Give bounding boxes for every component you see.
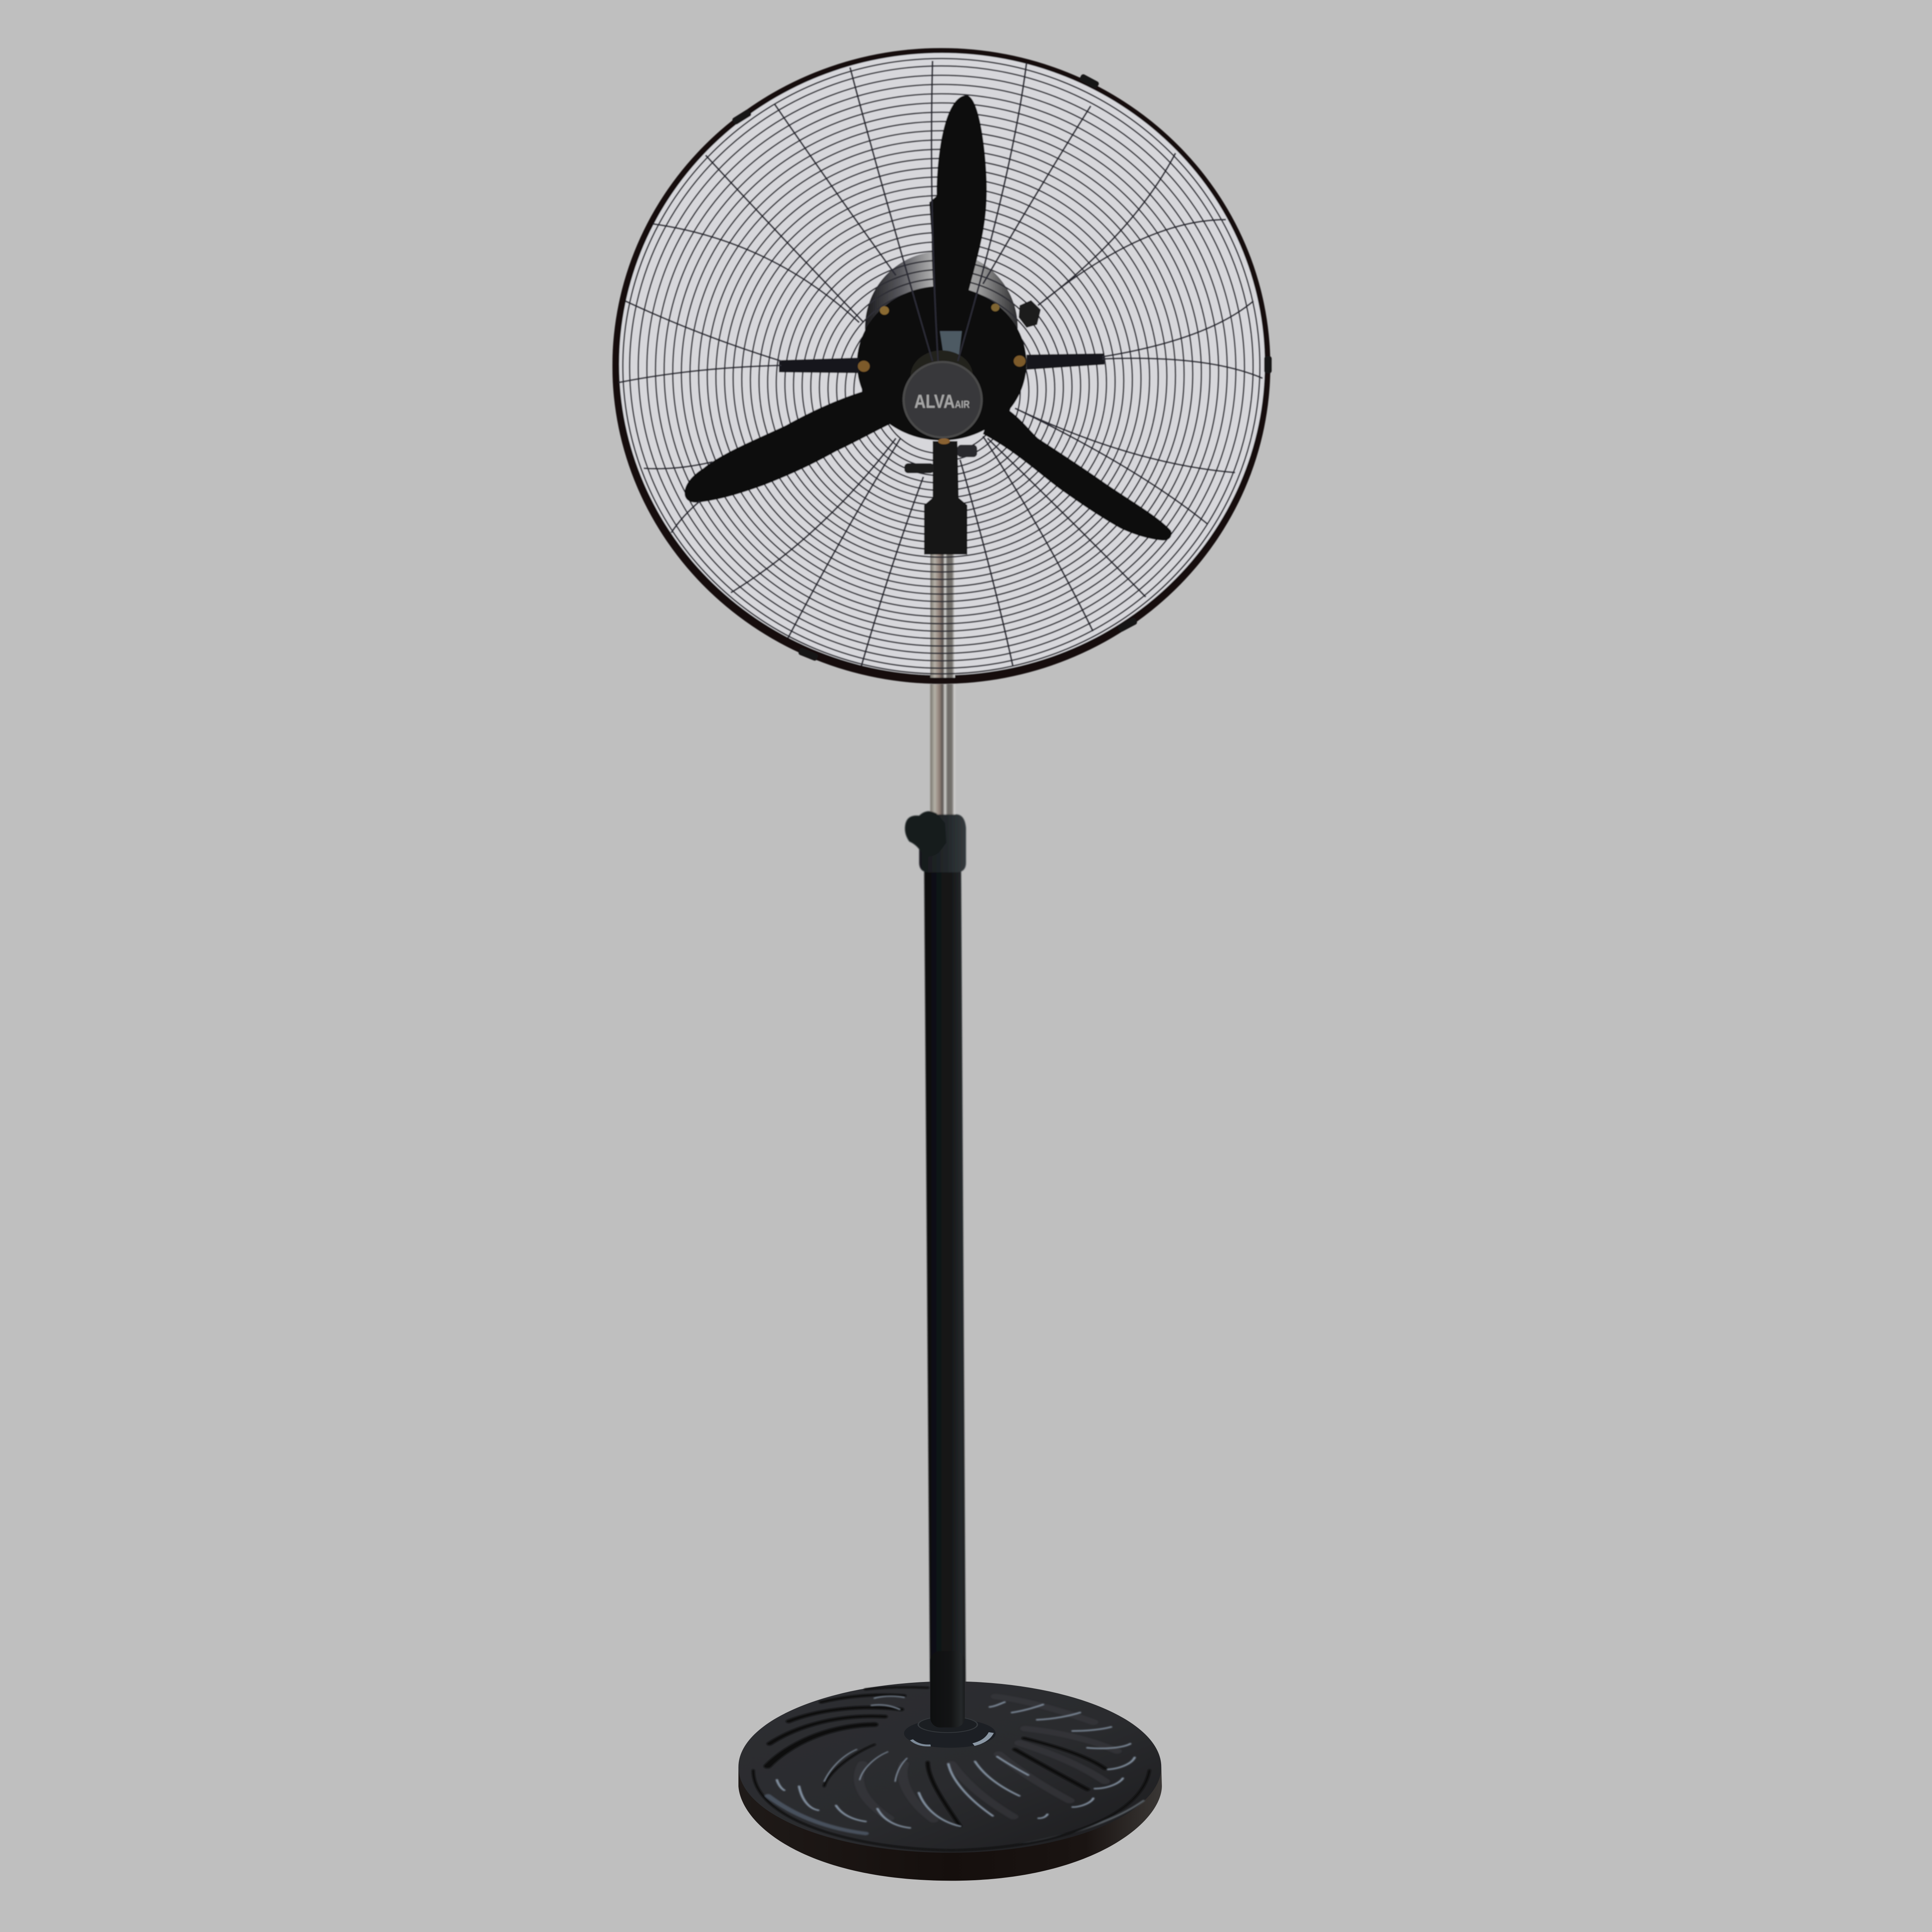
height clamp collar	[919, 814, 966, 872]
hub spinner cap	[904, 362, 981, 437]
base pole socket	[904, 1716, 996, 1748]
top blade	[929, 95, 987, 361]
swirl ribs: dark grooves	[767, 1687, 1105, 1826]
clip lower left	[798, 647, 819, 662]
fan hub and blades (hub coordinates)	[619, 61, 1262, 665]
motor housing	[857, 286, 1027, 440]
radial guard spokes	[619, 61, 1262, 665]
gold bolt right	[1014, 355, 1026, 367]
gold bolt left	[858, 361, 870, 372]
rear bracket bolt cluster	[1019, 300, 1041, 328]
gold bolt upper right	[991, 304, 1000, 311]
cage rim (outer hoop)	[612, 48, 1270, 684]
concentric guard wires	[623, 58, 1260, 674]
swirl ribs: bluish highlights	[777, 1696, 1135, 1828]
pole lower end entering base	[930, 1651, 965, 1728]
clip top left	[731, 109, 752, 126]
base side skirt	[738, 1767, 1162, 1881]
black lower pole	[924, 862, 966, 1725]
left mounting arm	[779, 358, 859, 373]
clip top right	[1079, 73, 1100, 89]
rear motor housing silver arc	[865, 252, 1018, 404]
chrome tube seen through guard	[930, 542, 955, 678]
chrome upper tube	[930, 684, 955, 823]
stand: telescopic pole	[905, 684, 966, 1725]
cage interior	[619, 53, 1265, 675]
gold bolt upper left	[880, 306, 889, 315]
motor front ring	[910, 350, 973, 402]
blade root sheen	[940, 331, 962, 361]
tilt joint seen through cage	[905, 441, 977, 554]
clip right	[1264, 356, 1272, 373]
brand logo on spinner: ALVAAIR	[914, 391, 970, 412]
base top rim highlights	[753, 1770, 1150, 1850]
tilt neck and sleeve	[924, 441, 967, 554]
fan head	[612, 48, 1272, 684]
weighted round base	[738, 1681, 1162, 1881]
tilt bracket left	[905, 463, 934, 473]
right mounting arm	[1027, 354, 1104, 370]
gold bolt bottom	[938, 438, 950, 444]
clip lower right	[1117, 617, 1138, 633]
rim clips	[731, 73, 1272, 662]
tilt bracket right	[957, 445, 977, 457]
base top surface	[738, 1681, 1161, 1853]
swirl ribs: soft raised bands	[859, 1697, 1117, 1820]
left blade	[685, 389, 900, 502]
height adjustment knob	[905, 811, 946, 857]
right blade	[983, 408, 1172, 541]
